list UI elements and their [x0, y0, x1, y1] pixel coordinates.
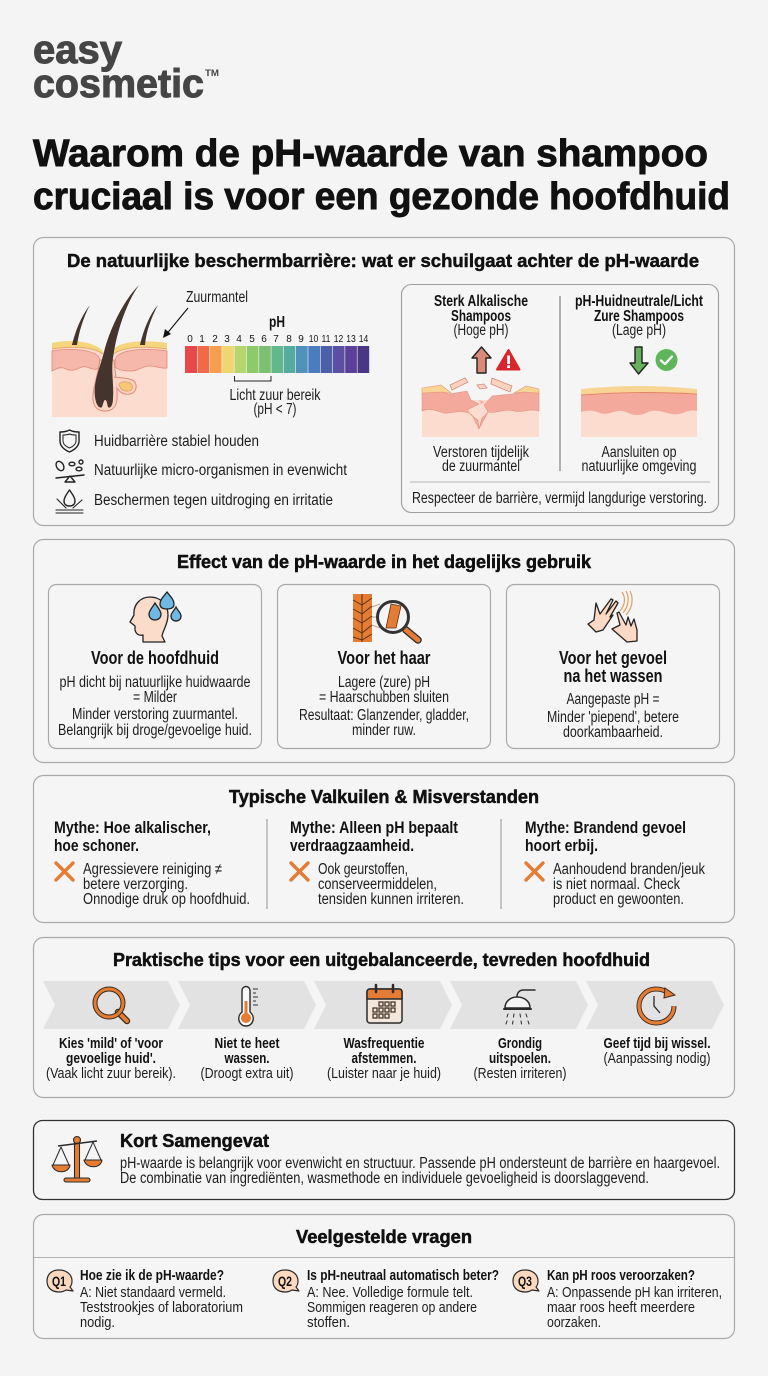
myth 2: tensiden kunnen irriteren.	[318, 891, 464, 908]
card: hoofdhuid: = Milder	[133, 689, 177, 706]
panel: veelgestelde vragen	[34, 1214, 734, 1338]
tip 4: Grondig	[498, 1035, 542, 1052]
title	[33, 133, 730, 218]
benefit list: Beschermen tegen uitdroging en irritatie	[94, 492, 333, 509]
column: pH-neutral shampoo: pH-Huidneutrale/Licht	[575, 293, 704, 310]
faq 3: Kan pH roos veroorzaken?	[547, 1267, 695, 1284]
tip 1: Kies 'mild' of 'voor	[59, 1035, 163, 1052]
faq 3: A: Onpassende pH kan irriteren,	[547, 1284, 722, 1301]
myth 1: Agressievere reiniging ≠	[83, 861, 222, 878]
card: hoofdhuid: pH dicht bij natuurlijke huidwaarde	[60, 674, 250, 691]
myth 1: Onnodige druk op hoofdhuid.	[83, 891, 250, 908]
myth 3: hoort erbij.	[525, 836, 598, 855]
pH scale: 2	[212, 334, 218, 345]
myth 2: verdraagzaamheid.	[290, 836, 414, 855]
benefit list: Natuurlijke micro-organismen in evenwicht	[94, 462, 348, 479]
faq 2	[273, 1267, 499, 1331]
icon: hands with hair	[588, 591, 637, 642]
pH scale: 12	[334, 334, 344, 345]
faq 1: Teststrookjes of laboratorium	[80, 1299, 243, 1316]
faq 2: A: Nee. Volledige formule telt.	[307, 1284, 473, 1301]
myth 3: is niet normaal. Check	[553, 876, 680, 893]
icon: micro-organisms balance	[54, 460, 84, 482]
card: gevoel: doorkambaarheid.	[563, 724, 663, 741]
card: haar: = Haarschubben sluiten	[319, 689, 449, 706]
icon: hair under magnifier	[353, 594, 418, 642]
column: alkaline shampoo: Sterk Alkalische	[434, 293, 528, 310]
tip 4	[450, 981, 588, 1082]
card: gevoel: Aangepaste pH =	[566, 691, 660, 708]
pH scale	[185, 314, 369, 418]
panel: kort samengevat: De combinatie van ingrediënten, wasmethode en individuele gevoeligheid is doorslaggevend.	[120, 1170, 649, 1187]
illustration: damaged skin	[422, 378, 539, 437]
panel: valkuilen en misverstanden	[34, 776, 734, 922]
faq 2: Sommigen reageren op andere	[307, 1299, 477, 1316]
card: gevoel	[506, 584, 720, 748]
pH scale: 3	[224, 334, 230, 345]
pH scale: 9	[298, 334, 304, 345]
faq 1	[47, 1267, 243, 1331]
column: pH-neutral shampoo	[575, 293, 704, 475]
card: haar: Voor het haar	[338, 648, 430, 668]
icon: head with drops	[130, 592, 181, 642]
myth 3: Aanhoudend branden/jeuk	[553, 861, 705, 878]
illustration: healthy skin	[581, 386, 697, 437]
myth 1: Mythe: Hoe alkalischer,	[54, 818, 211, 837]
faq 1: A: Niet standaard vermeld.	[80, 1284, 226, 1301]
callout: Zuurmantel	[163, 289, 248, 338]
panel: effect in dagelijks gebruik	[34, 540, 734, 762]
card: hoofdhuid: Voor de hoofdhuid	[91, 648, 219, 668]
tip 3: afstemmen.	[352, 1050, 416, 1067]
tip 5	[586, 981, 724, 1067]
myth 2: Ook geurstoffen,	[318, 861, 408, 878]
pH scale: 0	[187, 334, 193, 345]
icon: arrow up	[472, 347, 491, 373]
column: pH-neutral shampoo: (Lage pH)	[612, 322, 666, 339]
title: Waarom de pH-waarde van shampoo	[33, 133, 708, 175]
icon: arrow down	[630, 347, 648, 374]
faq 3: oorzaken.	[547, 1314, 601, 1331]
heading: beschermbarrière: De natuurlijke beschermbarrière: wat er schuilgaat achter de pH-waarde	[67, 250, 699, 271]
tip 2: (Droogt extra uit)	[200, 1065, 294, 1082]
tip 1: gevoelige huid'.	[66, 1050, 156, 1067]
icon: calendar	[367, 985, 402, 1023]
heading: kort samengevat: Kort Samengevat	[120, 1131, 269, 1151]
pH scale: 11	[322, 334, 331, 345]
logo: easy cosmetic	[33, 28, 219, 106]
tip 2: Niet te heet	[214, 1035, 280, 1052]
tip 4: uitspoelen.	[489, 1050, 551, 1067]
icon: Q2 bubble	[273, 1270, 299, 1292]
heading: tips: Praktische tips voor een uitgebalanceerde, tevreden hoofdhuid	[113, 950, 650, 970]
logo: easy cosmetic: easy	[33, 28, 123, 72]
tip 5: (Aanpassing nodig)	[604, 1050, 710, 1067]
pH scale: 5	[249, 334, 255, 345]
logo: easy cosmetic: cosmetic	[33, 62, 204, 106]
card: hoofdhuid	[48, 584, 262, 748]
benefit list: Huidbarrière stabiel houden	[94, 433, 259, 450]
myth 1: betere verzorging.	[83, 876, 188, 893]
column: alkaline shampoo: de zuurmantel	[442, 458, 520, 475]
icon: cross	[56, 863, 73, 880]
pH scale: (pH < 7)	[254, 401, 296, 418]
card: hoofdhuid: Minder verstoring zuurmantel.	[72, 706, 238, 723]
faq 1: Hoe zie ik de pH-waarde?	[80, 1267, 224, 1284]
icon: shield	[60, 430, 79, 452]
benefit list	[54, 430, 348, 513]
icon: Q2 bubble: Q2	[278, 1273, 292, 1289]
pH scale: 14	[359, 334, 369, 345]
icon: cross	[291, 863, 308, 880]
icon: Q3 bubble: Q3	[518, 1273, 532, 1289]
icon: check	[656, 349, 678, 371]
faq 2: Is pH-neutraal automatisch beter?	[307, 1267, 499, 1284]
myth 3: product en gewoonten.	[553, 891, 684, 908]
card: haar	[278, 584, 490, 748]
icon: Q1 bubble	[47, 1270, 73, 1292]
tip 1	[43, 981, 180, 1082]
column: alkaline shampoo: Verstoren tijdelijk	[433, 444, 529, 461]
title: cruciaal is voor een gezonde hoofdhuid	[33, 176, 730, 218]
panel: kort samengevat	[34, 1120, 734, 1200]
tip 4: (Resten irriteren)	[474, 1065, 567, 1082]
column: pH-neutral shampoo: natuurlijke omgeving	[582, 458, 696, 475]
column: pH-neutral shampoo: Zure Shampoos	[594, 308, 684, 325]
pH scale: 10	[309, 334, 319, 345]
faq 1: nodig.	[80, 1314, 115, 1331]
icon: scales	[52, 1136, 102, 1182]
heading: effect: Effect van de pH-waarde in het dagelijks gebruik	[177, 552, 592, 572]
myth 1	[54, 818, 250, 908]
faq 2: stoffen.	[307, 1314, 350, 1331]
pH scale: Licht zuur bereik	[230, 387, 321, 404]
card: haar: minder ruw.	[352, 722, 416, 739]
tip 1: (Vaak licht zuur bereik).	[46, 1065, 176, 1082]
pH scale: 13	[346, 334, 356, 345]
heading: valkuilen: Typische Valkuilen & Misverstanden	[229, 787, 539, 807]
card: gevoel: na het wassen	[564, 666, 662, 686]
icon: warning	[497, 350, 520, 370]
card: haar: Lagere (zure) pH	[338, 674, 430, 691]
tip 3: Wasfrequentie	[344, 1035, 424, 1052]
tip 2	[178, 981, 316, 1082]
card: haar: Resultaat: Glanzender, gladder,	[299, 707, 469, 724]
icon: water drop protection	[56, 490, 83, 513]
heading: veelgestelde vragen: Veelgestelde vragen	[296, 1227, 472, 1247]
callout: Zuurmantel: Zuurmantel	[186, 289, 248, 306]
faq 3: maar roos heeft meerdere	[547, 1299, 695, 1316]
faq 3	[513, 1267, 722, 1331]
icon: thermometer	[239, 986, 258, 1026]
pH scale: 8	[286, 334, 292, 345]
myth 2: conserveermiddelen,	[318, 876, 437, 893]
column: alkaline shampoo	[422, 293, 539, 475]
pH scale: pH	[269, 314, 285, 331]
icon: shower	[504, 990, 535, 1024]
card: gevoel: Voor het gevoel	[559, 648, 667, 668]
icon: cross	[526, 863, 543, 880]
tip 3	[314, 981, 452, 1082]
myth 2	[290, 818, 464, 908]
pH scale: 4	[236, 334, 242, 345]
panel: praktische tips	[34, 938, 734, 1098]
icon: magnifier	[95, 989, 127, 1021]
icon: clock with arrow	[639, 988, 675, 1023]
illustration: hair follicle in skin	[52, 285, 167, 417]
card: hoofdhuid: Belangrijk bij droge/gevoelige huid.	[58, 722, 252, 739]
column: alkaline shampoo: Shampoos	[451, 308, 511, 325]
card: gevoel: Minder 'piepend', betere	[547, 709, 679, 726]
myth 2: Mythe: Alleen pH bepaalt	[290, 818, 458, 837]
pH scale: 6	[261, 334, 267, 345]
myth 3	[525, 818, 705, 908]
column: pH-neutral shampoo: Aansluiten op	[602, 444, 676, 461]
myth 1: hoe schoner.	[54, 836, 139, 855]
pH scale: 1	[199, 334, 205, 345]
column: alkaline shampoo: (Hoge pH)	[454, 322, 508, 339]
tip 3: (Luister naar je huid)	[327, 1065, 441, 1082]
tip 5: Geef tijd bij wissel.	[604, 1035, 710, 1052]
icon: Q1 bubble: Q1	[52, 1273, 66, 1289]
myth 3: Mythe: Brandend gevoel	[525, 818, 686, 837]
panel: natuurlijke beschermbarrière	[34, 238, 734, 526]
pH scale: 7	[273, 334, 279, 345]
logo: easy cosmetic: TM	[205, 68, 219, 78]
panel: comparison shampoos	[402, 284, 718, 512]
icon: Q3 bubble	[513, 1270, 539, 1292]
tip 2: wassen.	[224, 1050, 270, 1067]
